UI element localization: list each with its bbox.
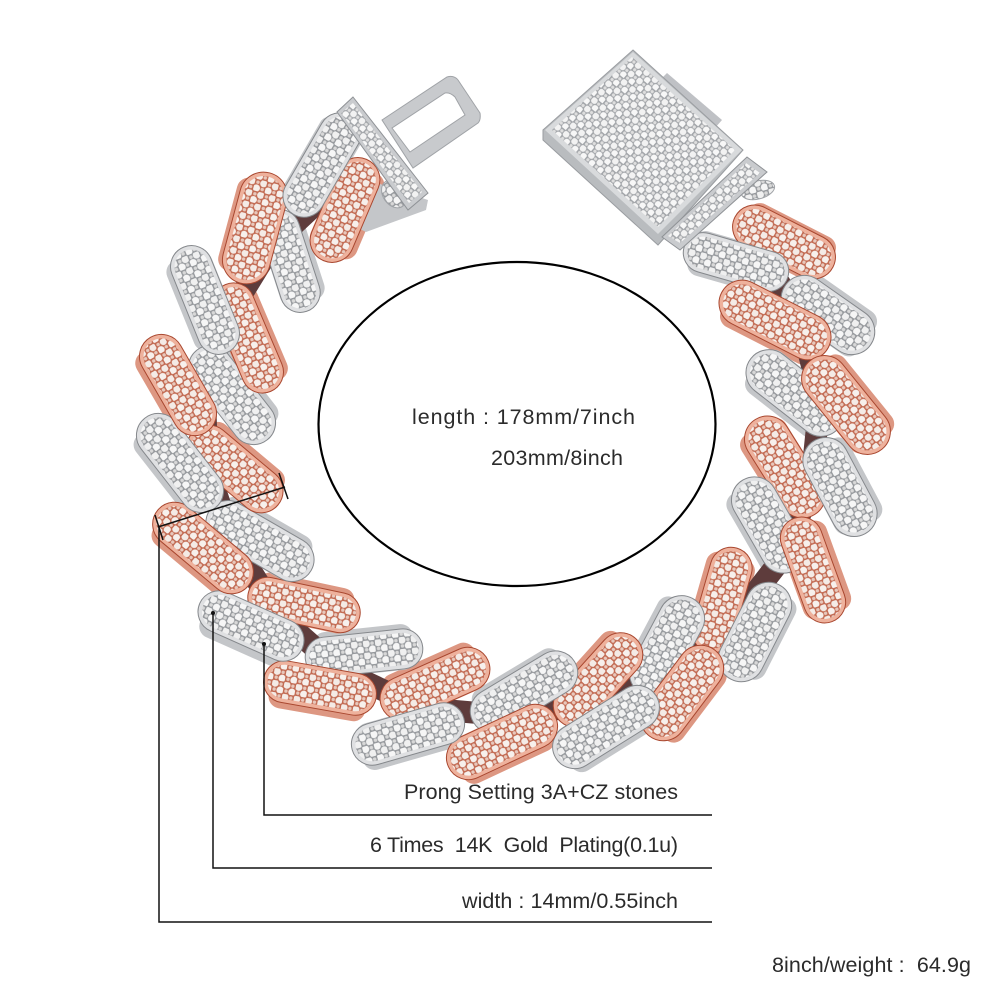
rose link xyxy=(711,272,839,368)
rose link xyxy=(144,493,262,603)
right stone bar xyxy=(662,157,767,250)
right end stones xyxy=(739,177,777,203)
silver link xyxy=(346,698,470,770)
rose link xyxy=(303,151,387,269)
silver link xyxy=(128,405,232,521)
safety tab loop xyxy=(382,76,480,168)
left stone bar xyxy=(337,97,428,210)
clasp side tab xyxy=(660,73,722,128)
silver link xyxy=(723,468,815,582)
left end stones xyxy=(376,175,412,213)
oval outline xyxy=(318,262,716,586)
width label: width : 14mm/0.55inch xyxy=(461,889,678,913)
silver link xyxy=(544,677,668,777)
silver link xyxy=(679,228,793,296)
silver link xyxy=(710,574,800,690)
rose link xyxy=(244,574,364,636)
rose link xyxy=(260,657,380,719)
stones label: Prong Setting 3A+CZ stones xyxy=(404,780,678,804)
rose link xyxy=(131,326,225,444)
rose link xyxy=(178,416,292,522)
plating label: 6 Times 14K Gold Plating(0.1u) xyxy=(370,833,678,857)
leader line: plating xyxy=(213,613,712,868)
rose link xyxy=(774,511,852,629)
rose link xyxy=(725,197,843,287)
rose link xyxy=(792,346,900,464)
silver link xyxy=(180,337,284,453)
silver link xyxy=(795,429,885,545)
link shadow gaps xyxy=(205,188,820,716)
silver link xyxy=(191,584,311,668)
length text second value: 203mm/8inch xyxy=(491,446,623,470)
clasp xyxy=(543,50,743,245)
silver link xyxy=(275,105,369,225)
link bodies xyxy=(129,112,899,788)
leader line: stones xyxy=(264,644,712,815)
silver link xyxy=(255,204,325,318)
rose link xyxy=(217,167,293,289)
rose link xyxy=(439,697,565,787)
silver link xyxy=(737,340,853,446)
weight label: 8inch/weight : 64.9g xyxy=(772,953,971,977)
rose link xyxy=(373,640,497,728)
silver link xyxy=(303,627,425,679)
rose link xyxy=(631,636,733,750)
rose link xyxy=(736,407,834,527)
silver link xyxy=(621,588,713,704)
length text: length : 178mm/7inch xyxy=(412,405,635,429)
silver link xyxy=(198,492,322,590)
silver link xyxy=(772,266,884,364)
width dimension marker xyxy=(155,473,288,540)
silver link xyxy=(462,643,586,741)
silver link xyxy=(164,239,246,361)
leader line: width xyxy=(159,527,712,922)
rose link xyxy=(687,542,757,658)
rose link xyxy=(206,276,290,400)
end piece: left silver body xyxy=(352,183,428,232)
rose link xyxy=(544,624,652,736)
leader dots xyxy=(211,611,266,646)
bracelet xyxy=(128,105,900,788)
